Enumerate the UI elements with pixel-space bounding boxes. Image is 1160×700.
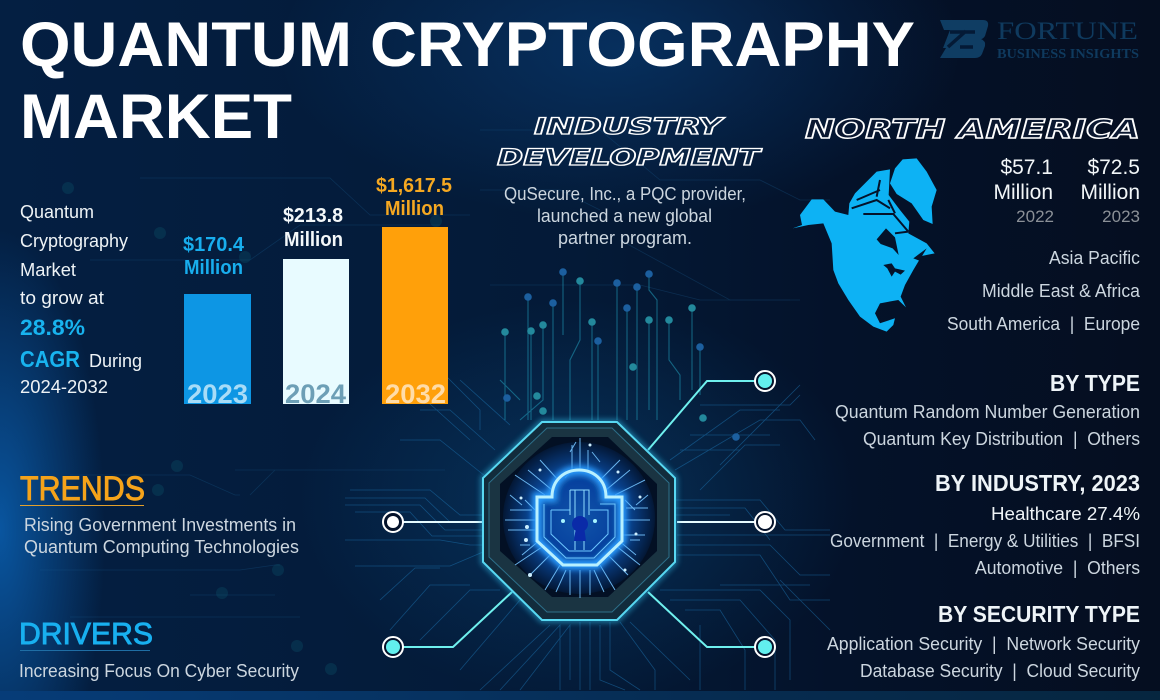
growth summary text: Market [20,260,76,280]
industry development: INDUSTRY [534,115,725,140]
industry development: launched a new global [537,206,712,226]
bar 2032: $1,617.5 [376,175,452,197]
bar 2023: 2023 [187,379,248,409]
bar 2023: $170.4 [183,234,245,256]
by security type: BY SECURITY TYPE [938,601,1140,627]
growth summary text: 2024-2032 [20,377,108,397]
other regions: Asia Pacific [1049,248,1140,268]
by security type: Application Security | Network Security [827,634,1140,654]
by security type [827,601,1140,681]
arrow: connector bottom left [383,592,512,657]
bar 2024: $213.8 [283,205,343,227]
bar 2032: 2032 [385,379,446,409]
arrow: connector middle right [677,512,775,532]
bar chart [183,175,452,409]
logo: Fortune Business Insights [940,18,1139,62]
by industry: BY INDUSTRY, 2023 [935,470,1140,496]
bar 2024: Million [284,229,343,251]
other regions [947,248,1141,334]
industry development: partner program. [558,228,692,248]
by type [835,370,1140,449]
bar 2032: Million [385,198,444,220]
north america heading: NORTH AMERICA [805,115,1140,145]
growth summary text: to grow at [20,288,104,308]
padlock glow [537,470,622,565]
bar 2024: 2024 [285,379,346,409]
logo: Fortune Business Insights: BUSINESS INSIGHTS [997,47,1139,62]
bar 2032 [376,175,452,409]
industry development [497,115,763,248]
industry development: QuSecure, Inc., a PQC provider, [504,184,746,204]
by industry: Healthcare 27.4% [991,504,1140,524]
background circuit traces [345,370,830,690]
growth summary text: Cryptography [20,231,128,251]
icon: north america map [793,158,937,332]
bar 2024 [283,205,349,409]
growth summary text: Quantum [20,202,94,222]
north america values: Million [993,181,1053,204]
arrow: connector top right [648,371,775,450]
arrow: connector bottom right [648,592,775,657]
drivers: DRIVERS [19,616,153,651]
growth summary text: 28.8% [20,315,85,340]
by type: BY TYPE [1050,370,1140,396]
bar 2023 [183,234,251,409]
other regions: Middle East & Africa [982,281,1141,301]
title: MARKET [20,82,292,152]
trends: Quantum Computing Technologies [24,537,299,557]
growth summary text [20,202,142,397]
drivers: Increasing Focus On Cyber Security [19,661,299,681]
by type: Quantum Key Distribution | Others [863,429,1140,449]
trends [20,470,299,557]
by security type: Database Security | Cloud Security [860,661,1140,681]
north america values [993,156,1140,226]
by type: Quantum Random Number Generation [835,402,1140,422]
by industry [830,470,1140,578]
north america values: 2023 [1102,207,1140,226]
north america values: $72.5 [1087,156,1140,179]
drivers [19,616,299,681]
north america values: Million [1080,181,1140,204]
other regions: South America | Europe [947,314,1140,334]
by industry: Government | Energy & Utilities | BFSI [830,531,1140,551]
north america values: $57.1 [1000,156,1053,179]
logo: Fortune Business Insights: FORTUNE [997,18,1138,45]
title: QUANTUM CRYPTOGRAPHY [20,10,915,80]
title [20,10,915,152]
arrow: connector middle left [383,512,483,532]
industry development: DEVELOPMENT [497,146,763,171]
trends: TRENDS [20,470,145,508]
growth summary text: CAGR [20,346,80,372]
trends: Rising Government Investments in [24,515,296,535]
north america values: 2022 [1016,207,1054,226]
bar 2023: Million [184,257,243,279]
icon: octagon padlock [483,422,675,620]
by industry: Automotive | Others [975,558,1140,578]
growth summary text: During [89,351,142,371]
